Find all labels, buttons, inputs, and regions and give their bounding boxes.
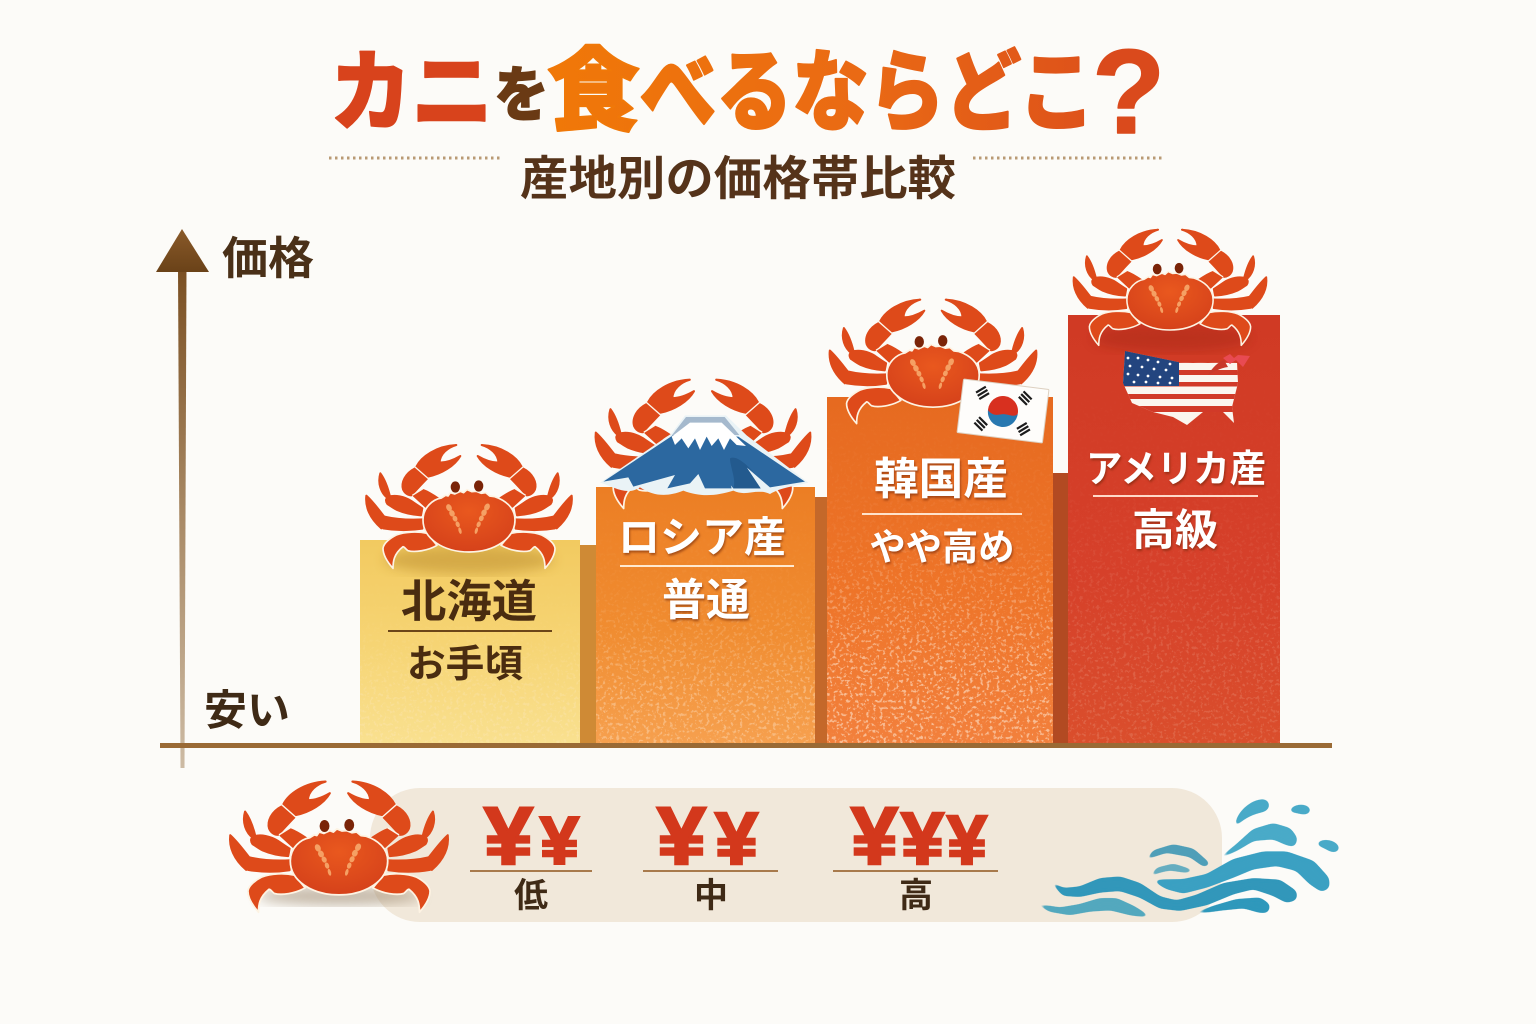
bar: アメリカ産: アメリカ産 bbox=[1086, 449, 1266, 491]
bar: 韓国産: 韓国産 bbox=[874, 455, 1008, 504]
crab shadow bbox=[258, 887, 422, 905]
legend: low: ¥ bbox=[484, 791, 533, 882]
wave: middle band bbox=[1051, 877, 1296, 910]
bar: ロシア産 bbox=[596, 487, 815, 743]
crab: legend bbox=[230, 782, 448, 912]
bar: ロシア産: ロシア産 bbox=[618, 514, 786, 561]
title bbox=[330, 25, 1165, 159]
legend: low bbox=[470, 791, 592, 915]
icon: Mount Fuji bbox=[600, 415, 808, 495]
price axis: 安い bbox=[204, 687, 290, 734]
wave: small arc bbox=[1148, 864, 1195, 878]
icon: Korean flag bbox=[957, 379, 1049, 443]
title: べるならどこ bbox=[640, 43, 1095, 142]
bar: 韓国産 bbox=[827, 397, 1053, 743]
bar: アメリカ産: 高級 bbox=[1132, 507, 1218, 555]
crab: 韓国 bbox=[830, 300, 1036, 424]
wave: upper band bbox=[1154, 852, 1329, 893]
legend: high: 高 bbox=[899, 877, 933, 915]
title: を bbox=[494, 62, 549, 129]
wave: lower right band bbox=[1191, 898, 1269, 914]
wave: top arc bbox=[1143, 845, 1211, 867]
wave: splash bbox=[1217, 800, 1339, 860]
bar: アメリカ産 bbox=[1068, 315, 1280, 743]
wave: lower left band bbox=[1026, 894, 1149, 917]
legend: mid: ¥ bbox=[715, 797, 758, 880]
title: 食 bbox=[547, 42, 640, 143]
crab: アメリカ bbox=[1074, 230, 1266, 345]
price axis: 価格 bbox=[222, 233, 314, 284]
bar: 北海道: 北海道 bbox=[401, 576, 537, 627]
price axis bbox=[156, 229, 314, 768]
crab: 北海道 bbox=[366, 445, 572, 568]
legend: mid: 中 bbox=[694, 877, 728, 915]
icon: wave bbox=[1026, 800, 1339, 917]
gaps between bars bbox=[580, 473, 1070, 743]
title: カニ bbox=[330, 43, 493, 142]
bar: 韓国産: やや高め bbox=[870, 527, 1014, 568]
legend: high: ¥ bbox=[851, 791, 898, 882]
bar: 北海道 bbox=[360, 540, 580, 743]
baseline bbox=[160, 743, 1332, 748]
legend: low: 低 bbox=[514, 877, 548, 915]
legend: high: ¥ bbox=[901, 797, 944, 880]
legend: mid bbox=[643, 791, 778, 915]
subtitle: 産地別の価格帯比較 bbox=[520, 152, 956, 205]
legend: high bbox=[833, 791, 998, 915]
price legend band bbox=[370, 788, 1222, 922]
crab: ロシア bbox=[596, 380, 810, 508]
icon: USA flag map bbox=[1123, 351, 1250, 425]
legend: low: ¥ bbox=[540, 803, 579, 879]
bar: 北海道: お手頃 bbox=[407, 644, 523, 686]
bar: ロシア産: 普通 bbox=[662, 576, 750, 625]
legend: high: ¥ bbox=[947, 801, 987, 879]
title: ? bbox=[1092, 25, 1165, 159]
legend: mid: ¥ bbox=[657, 791, 706, 882]
